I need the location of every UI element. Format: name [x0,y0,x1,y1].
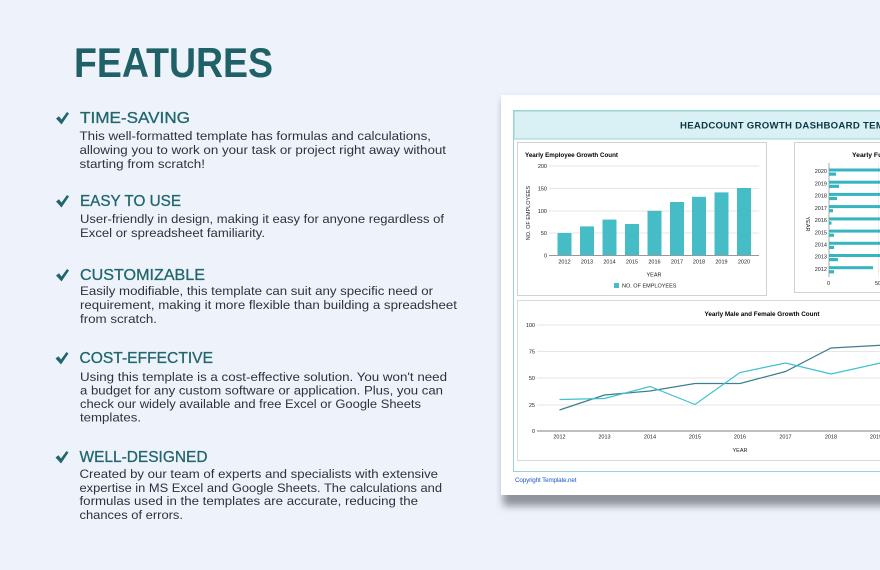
icon: check [56,269,69,282]
line chart: 2017 [779,434,792,440]
text: cost-effective description [80,370,447,424]
text: time-saving description [80,129,447,171]
bar chart: 2017 [671,260,683,266]
text: customizable description [80,284,458,326]
bar chart: 100 [538,209,547,215]
bar chart: 2014 [603,260,616,266]
heading: cost-effective: COST-EFFECTIVE [80,350,213,367]
dashboard card [501,95,880,495]
line chart: 25 [529,403,535,409]
line chart: 100 [526,323,535,329]
heading: customizable: CUSTOMIZABLE [80,267,205,284]
horizontal bar chart: 2016 [815,218,827,224]
heading: easy to use: EASY TO USE [80,193,181,210]
bar chart: YEAR [647,272,662,278]
line chart: 2018 [825,434,837,440]
bar chart: 2013 [581,260,593,266]
feature: well-designed [56,449,442,522]
icon: check [56,451,68,464]
bar chart: 2012 [558,260,571,266]
bar chart: 2020 [738,260,750,266]
text: cost-effective description: a budget for any custom software or application. Plus, you can [80,384,443,398]
icon: check [56,352,68,364]
text: well-designed description [80,467,442,522]
panel: yearly male and female growth count [518,300,880,460]
horizontal bar chart: 2017 [815,206,827,212]
text: well-designed description: Created by our team of experts and specialists with extensive [80,467,438,481]
series: female [560,362,880,404]
text: cost-effective description: Using this template is a cost-effective solution. You won't need [80,370,447,384]
text: customizable description: Easily modifiable, this template can suit any specific need or [80,284,433,298]
horizontal bar chart: 2018 [815,194,827,200]
line chart: 2014 [644,434,656,440]
panel: yearly functional count (cropped) [794,142,880,292]
text: cost-effective description: check our widely available and free Excel or Google Sheets [80,397,421,411]
horizontal bar chart: 2012 [815,267,827,273]
heading: well-designed: WELL-DESIGNED [80,449,208,466]
line chart: 2013 [598,434,611,440]
feature: customizable [56,267,458,326]
text: well-designed description: formulas used in the templates are accurate, reducing the [80,494,418,508]
text: well-designed description: expertise in MS Excel and Google Sheets. The calculations and [80,481,442,495]
heading: time-saving: TIME-SAVING [80,110,190,127]
line chart: 2015 [689,434,701,440]
horizontal bar chart: 2014 [815,242,827,248]
bar chart: 2015 [626,260,638,266]
bar chart: NO. OF EMPLOYEES [526,185,532,240]
dashboard header [514,111,880,139]
feature: time-saving [56,110,447,171]
feature: easy to use [56,193,445,240]
bar chart: 2016 [648,260,661,266]
horizontal bar chart [804,163,880,287]
line chart: 75 [529,350,535,356]
chart title: Yearly Male and Female Growth Count [704,311,820,318]
icon: check [56,195,69,208]
chart title: Yearly Employee Growth Count [525,152,619,159]
horizontal bar chart: 2013 [815,255,827,261]
text: easy to use description [80,212,445,240]
bar chart: 2018 [693,260,705,266]
bar chart: 200 [538,164,547,170]
text: time-saving description: allowing you to work on your task or project right away without [80,143,447,157]
copyright: Copyright Template.net [515,477,577,484]
horizontal bar chart: 2019 [815,182,827,188]
text: well-designed description: chances of errors. [80,508,183,522]
text: easy to use description: User-friendly in design, making it easy for anyone regardless of [80,212,445,226]
bar chart: 150 [538,186,547,192]
panel: yearly employee growth count [518,142,766,296]
bar chart: 50 [541,231,547,237]
horizontal bar chart: 2020 [815,169,827,175]
card shadow [503,100,880,506]
series: male [560,345,880,410]
text: time-saving description: This well-formatted template has formulas and calculations, [80,129,431,143]
line chart: 50 [529,376,535,382]
line chart: 0 [532,429,535,435]
line chart: YEAR [733,448,748,454]
bar chart: 2019 [715,260,728,266]
horizontal bar chart: 2015 [815,230,827,236]
title: FEATURES [74,39,273,86]
icon: check [56,112,69,124]
text: cost-effective description: templates. [80,410,141,424]
feature: cost-effective [56,350,447,424]
text: customizable description: requirement, making it more flexible than building a spreadsheet [80,298,458,312]
dashboard frame [514,110,880,472]
text: easy to use description: Excel or spreadsheet familiarity. [80,226,265,240]
text: time-saving description: starting from scratch! [80,157,205,171]
line chart: 2012 [553,434,566,440]
bar chart: 0 [544,254,547,260]
line chart [526,323,880,454]
bar chart [526,164,759,290]
horizontal bar chart: YEAR [804,217,810,232]
line chart: 2016 [734,434,746,440]
horizontal bar chart: 0 [827,281,830,287]
bar chart: NO. OF EMPLOYEES [622,284,677,290]
text: customizable description: from scratch. [80,312,157,326]
